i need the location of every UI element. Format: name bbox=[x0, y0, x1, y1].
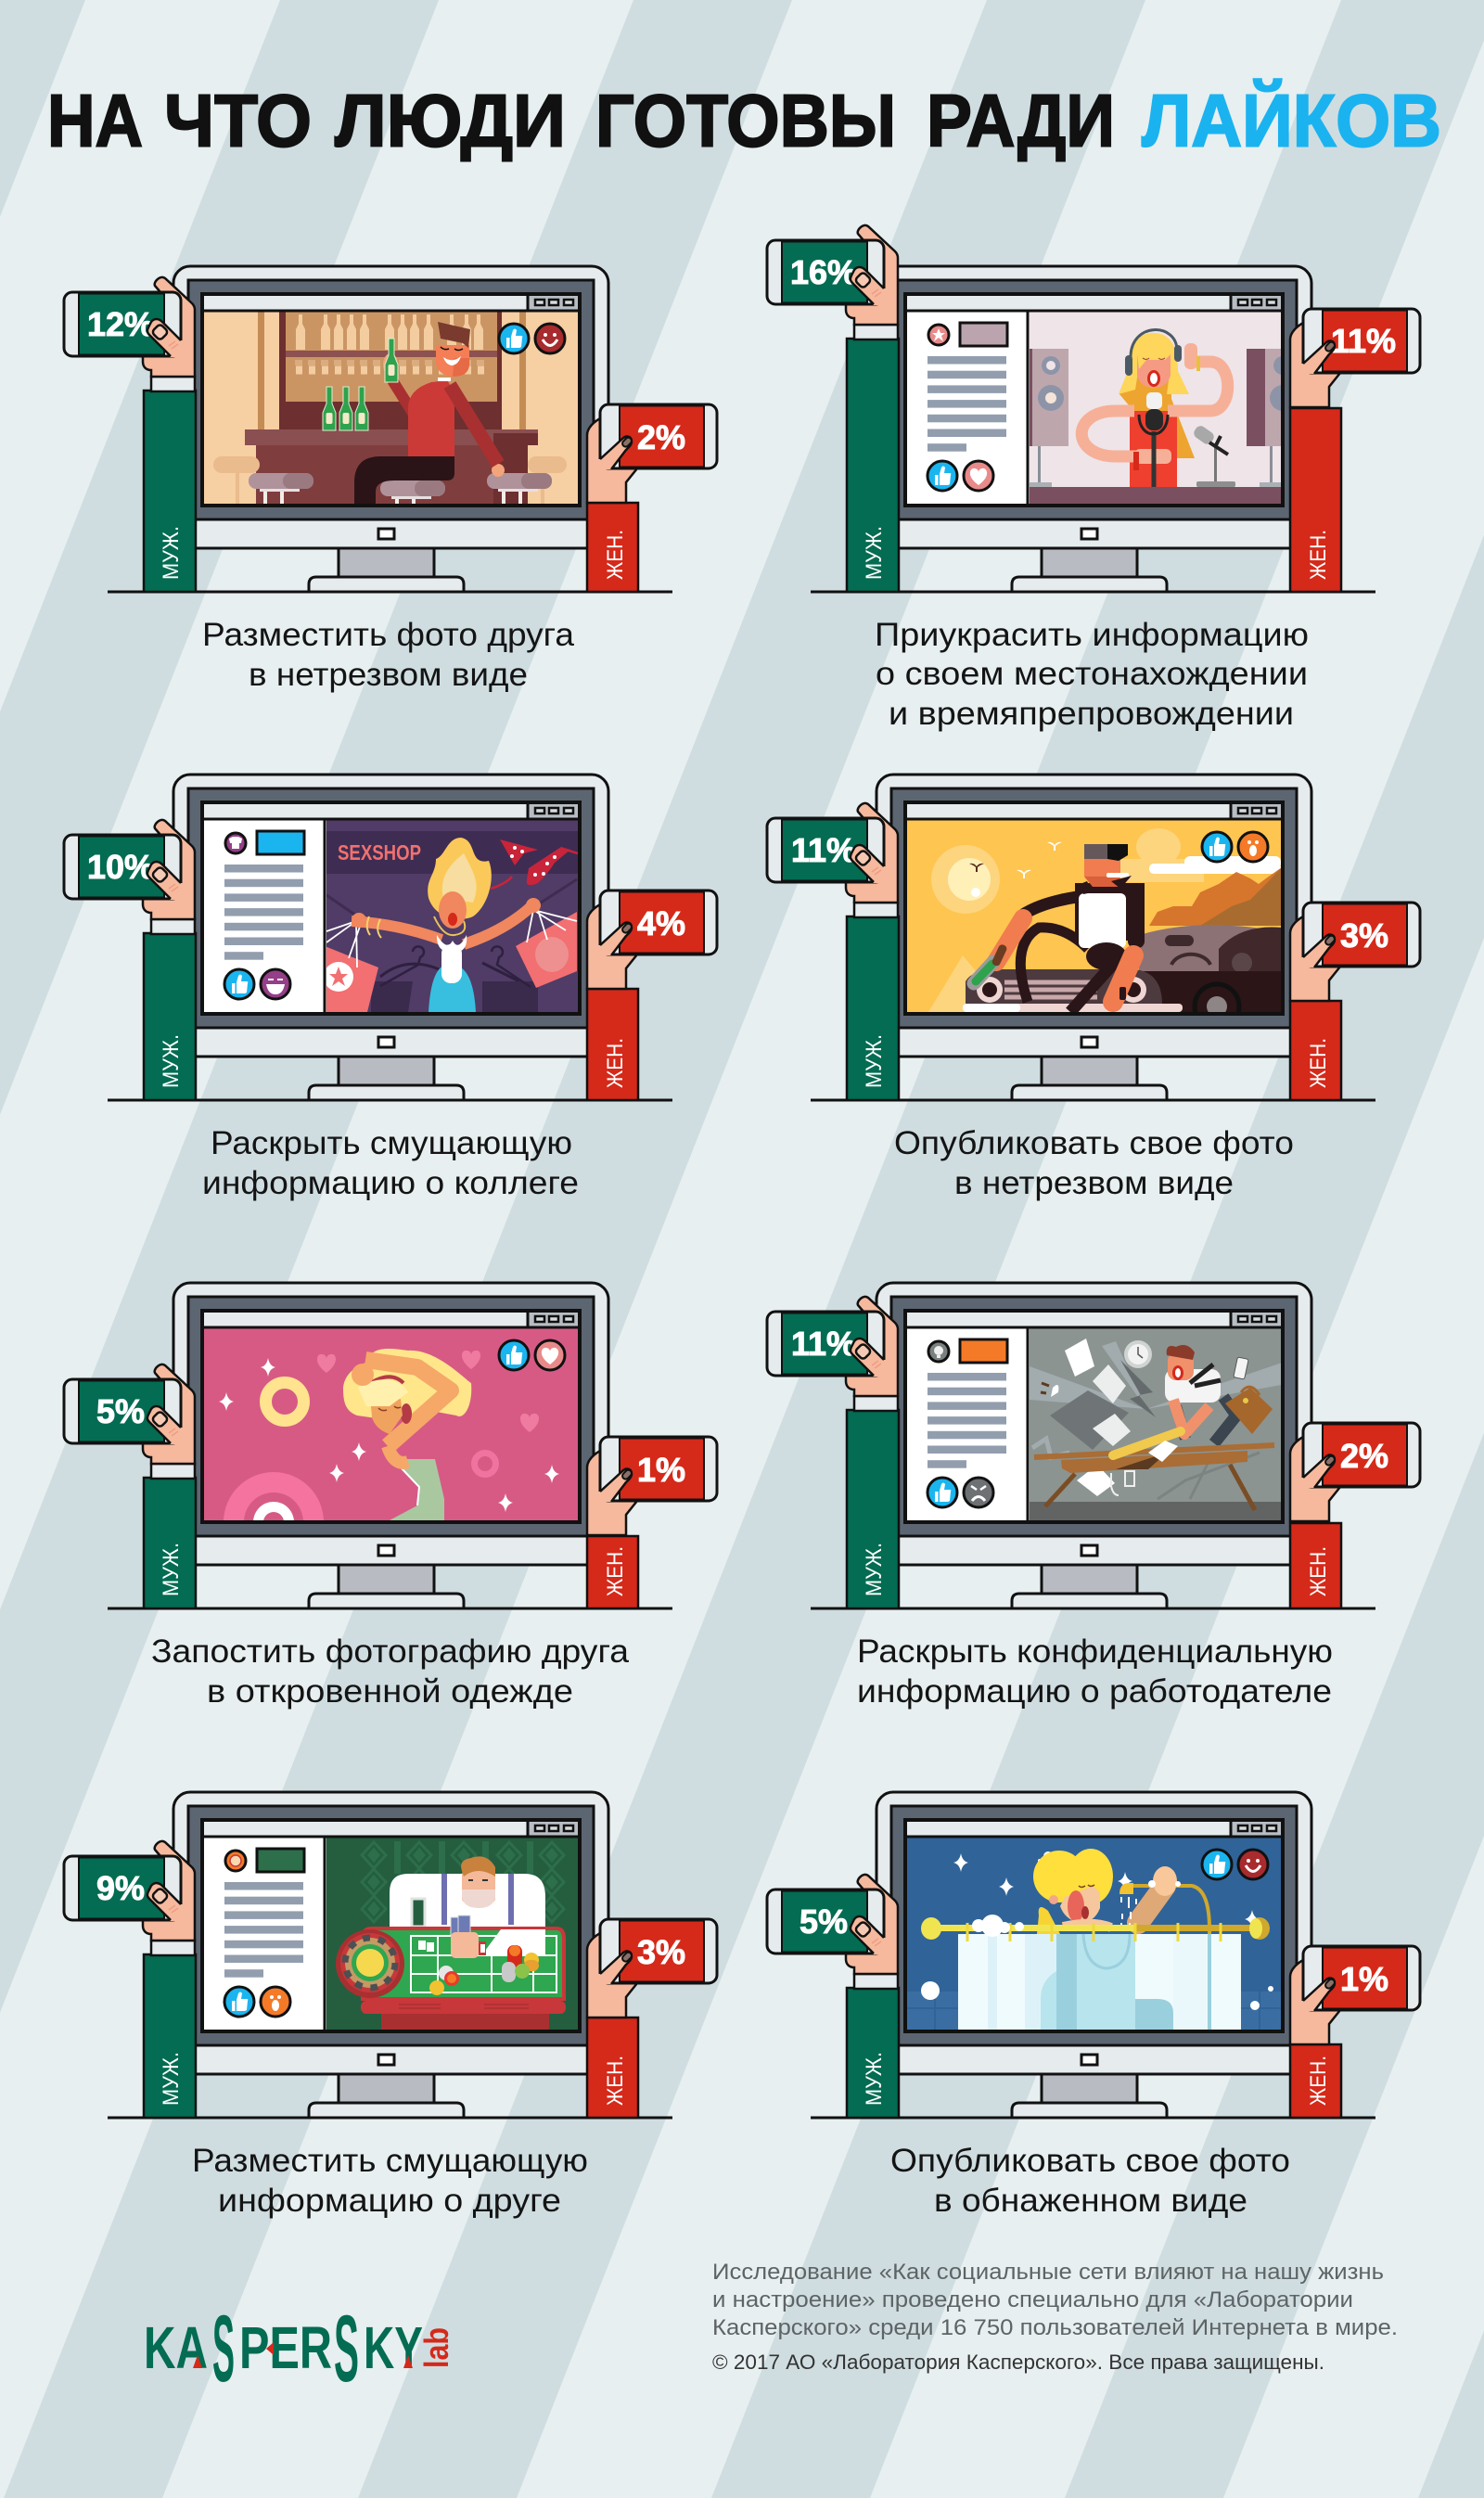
female arm with phone: 3% bbox=[587, 1919, 717, 2118]
male arm with phone: 11%: 11% bbox=[791, 831, 856, 869]
screen illustration: man at a bar bbox=[204, 312, 578, 512]
monitor bbox=[811, 775, 1375, 1100]
logo: Kaspersky Lab: KA bbox=[144, 2314, 208, 2381]
male arm with phone: 11%: МУЖ. bbox=[862, 1543, 887, 1596]
footer text: study note: Касперского» среди 16 750 пользователей Интернета в мире. bbox=[712, 2315, 1398, 2340]
caption: Запостить фотографию друга bbox=[151, 1633, 630, 1670]
female arm with phone: 3%: ЖЕН. bbox=[603, 2056, 628, 2106]
title: ЧТО bbox=[164, 80, 312, 161]
panel: embellish location info bbox=[767, 225, 1420, 732]
browser window bar bbox=[907, 1313, 1281, 1327]
logo: Kaspersky Lab: S bbox=[334, 2297, 359, 2402]
panel: embarrassing info about a colleague bbox=[64, 775, 717, 1201]
caption: о своем местонахождении bbox=[876, 656, 1308, 692]
caption: Разместить смущающую bbox=[192, 2143, 588, 2179]
female arm with phone: 1% bbox=[587, 1437, 717, 1608]
male arm with phone: 16% bbox=[767, 225, 899, 592]
caption: в нетрезвом виде bbox=[249, 657, 528, 693]
footer text: copyright: © 2017 АО «Лаборатория Касперского». Все права защищены. bbox=[712, 2351, 1324, 2374]
browser window bar bbox=[907, 804, 1281, 819]
panel: photo of a drunk friend bbox=[64, 266, 717, 693]
female arm with phone: 2%: ЖЕН. bbox=[1306, 1546, 1331, 1596]
female arm with phone: 11% bbox=[1290, 309, 1420, 592]
logo: Kaspersky Lab: lab bbox=[417, 2327, 455, 2368]
title: РАДИ bbox=[927, 80, 1115, 161]
panel: own nude photo bbox=[767, 1792, 1420, 2219]
browser window bar bbox=[204, 1822, 578, 1837]
monitor bbox=[811, 1792, 1375, 2118]
caption: в откровенной одежде bbox=[207, 1673, 573, 1710]
male arm with phone: 11%: 11% bbox=[791, 1325, 856, 1363]
panel: own drunk photo bbox=[767, 775, 1420, 1201]
female arm with phone: 2%: 2% bbox=[1340, 1437, 1388, 1475]
male arm with phone: 10%: МУЖ. bbox=[159, 1034, 184, 1088]
reaction icons bbox=[499, 1340, 565, 1370]
male arm with phone: 9%: МУЖ. bbox=[159, 2052, 184, 2106]
male arm with phone: 12%: 12% bbox=[87, 305, 154, 343]
male arm with phone: 16%: МУЖ. bbox=[862, 526, 887, 580]
reaction icons bbox=[1202, 1850, 1268, 1879]
screen illustration: woman singing bbox=[1030, 312, 1296, 504]
male arm with phone: 9%: 9% bbox=[96, 1869, 145, 1907]
monitor bbox=[108, 1792, 672, 2118]
sidebar with text lines bbox=[204, 1838, 325, 2030]
female arm with phone: 3%: 3% bbox=[1340, 916, 1388, 954]
browser window bar bbox=[907, 296, 1281, 311]
female arm with phone: 11%: ЖЕН. bbox=[1306, 530, 1331, 580]
female arm with phone: 11%: 11% bbox=[1331, 322, 1396, 360]
sidebar with text lines bbox=[907, 312, 1028, 504]
caption: в обнаженном виде bbox=[934, 2183, 1247, 2219]
screen illustration: woman in a sex shop: SEXSHOP bbox=[338, 840, 421, 865]
female arm with phone: 1%: ЖЕН. bbox=[603, 1546, 628, 1596]
female arm with phone: 4%: ЖЕН. bbox=[603, 1038, 628, 1088]
female arm with phone: 1%: 1% bbox=[1340, 1960, 1388, 1998]
title bbox=[47, 78, 1441, 161]
female arm with phone: 4%: 4% bbox=[637, 904, 685, 942]
browser window bar bbox=[204, 1313, 578, 1327]
male arm with phone: 5%: МУЖ. bbox=[862, 2052, 887, 2106]
browser window bar bbox=[204, 296, 578, 311]
male arm with phone: 5% bbox=[767, 1875, 899, 2118]
screen illustration: woman with blonde hair bbox=[204, 1328, 578, 1520]
logo: Kaspersky Lab: S bbox=[212, 2297, 235, 2402]
monitor bbox=[811, 1283, 1375, 1608]
title: НА bbox=[47, 80, 143, 161]
caption: информацию о работодателе bbox=[857, 1673, 1332, 1710]
male arm with phone: 10% bbox=[64, 820, 196, 1100]
panel: confidential employer info bbox=[767, 1283, 1420, 1710]
caption: Раскрыть смущающую bbox=[211, 1125, 572, 1161]
screen illustration: angry man smashing desk bbox=[1030, 1328, 1282, 1520]
monitor bbox=[108, 266, 672, 592]
reaction icons bbox=[499, 324, 565, 353]
panel: friend in revealing clothes bbox=[64, 1283, 717, 1710]
male arm with phone: 5%: 5% bbox=[800, 1902, 848, 1941]
caption: Приукрасить информацию bbox=[875, 617, 1309, 653]
caption: информацию о коллеге bbox=[202, 1165, 579, 1201]
female arm with phone: 3%: 3% bbox=[637, 1933, 685, 1971]
male arm with phone: 11% bbox=[767, 803, 899, 1100]
female arm with phone: 2%: 2% bbox=[637, 418, 685, 456]
caption: и времяпрепровождении bbox=[889, 696, 1294, 732]
footer text: study note: Исследование «Как социальные сети влияют на нашу жизнь bbox=[712, 2260, 1384, 2285]
caption: Опубликовать свое фото bbox=[894, 1125, 1294, 1161]
panel: embarrassing info about a friend bbox=[64, 1792, 717, 2219]
female arm with phone: 1% bbox=[1290, 1946, 1420, 2118]
female arm with phone: 2%: ЖЕН. bbox=[603, 530, 628, 580]
title: ГОТОВЫ bbox=[595, 80, 896, 161]
female arm with phone: 2% bbox=[1290, 1423, 1420, 1608]
sidebar with text lines bbox=[907, 1328, 1028, 1520]
screen illustration: woman in the shower bbox=[907, 1838, 1281, 2030]
monitor bbox=[108, 1283, 672, 1608]
male arm with phone: 5%: 5% bbox=[96, 1392, 145, 1430]
reaction icons bbox=[1202, 832, 1268, 862]
caption: Разместить фото друга bbox=[202, 617, 575, 653]
logo: Kaspersky Lab: KY bbox=[364, 2314, 423, 2381]
female arm with phone: 3% bbox=[1290, 903, 1420, 1100]
sidebar with text lines bbox=[204, 820, 325, 1012]
male arm with phone: 5%: МУЖ. bbox=[159, 1543, 184, 1596]
female arm with phone: 1%: ЖЕН. bbox=[1306, 2056, 1331, 2106]
male arm with phone: 12% bbox=[64, 277, 196, 592]
screen illustration: man in a car bbox=[907, 820, 1282, 1029]
title: ЛЮДИ bbox=[335, 80, 566, 161]
male arm with phone: 5% bbox=[64, 1364, 196, 1608]
browser window bar bbox=[907, 1822, 1281, 1837]
monitor bbox=[811, 266, 1375, 592]
screen illustration: woman in a sex shop bbox=[324, 820, 578, 1012]
female arm with phone: 4% bbox=[587, 890, 717, 1100]
logo: Kaspersky Lab: PER bbox=[239, 2314, 332, 2381]
male arm with phone: 10%: 10% bbox=[87, 848, 154, 886]
male arm with phone: 11%: МУЖ. bbox=[862, 1034, 887, 1088]
male arm with phone: 9% bbox=[64, 1841, 196, 2118]
footer text: study note: и настроение» проведено специально для «Лаборатории bbox=[712, 2287, 1353, 2312]
caption: в нетрезвом виде bbox=[954, 1165, 1234, 1201]
logo: Kaspersky Lab bbox=[144, 2297, 455, 2402]
female arm with phone: 1%: 1% bbox=[637, 1451, 685, 1489]
female arm with phone: 3%: ЖЕН. bbox=[1306, 1038, 1331, 1088]
caption: информацию о друге bbox=[218, 2183, 561, 2219]
monitor bbox=[108, 775, 672, 1100]
caption: Раскрыть конфиденциальную bbox=[857, 1633, 1333, 1670]
browser window bar bbox=[204, 804, 578, 819]
male arm with phone: 12%: МУЖ. bbox=[159, 526, 184, 580]
screen illustration: casino roulette table bbox=[326, 1838, 578, 2030]
male arm with phone: 16%: 16% bbox=[790, 253, 857, 291]
female arm with phone: 2% bbox=[587, 404, 717, 592]
male arm with phone: 11% bbox=[767, 1297, 899, 1608]
title: ЛАЙКОВ bbox=[1142, 78, 1441, 161]
caption: Опубликовать свое фото bbox=[890, 2143, 1290, 2179]
